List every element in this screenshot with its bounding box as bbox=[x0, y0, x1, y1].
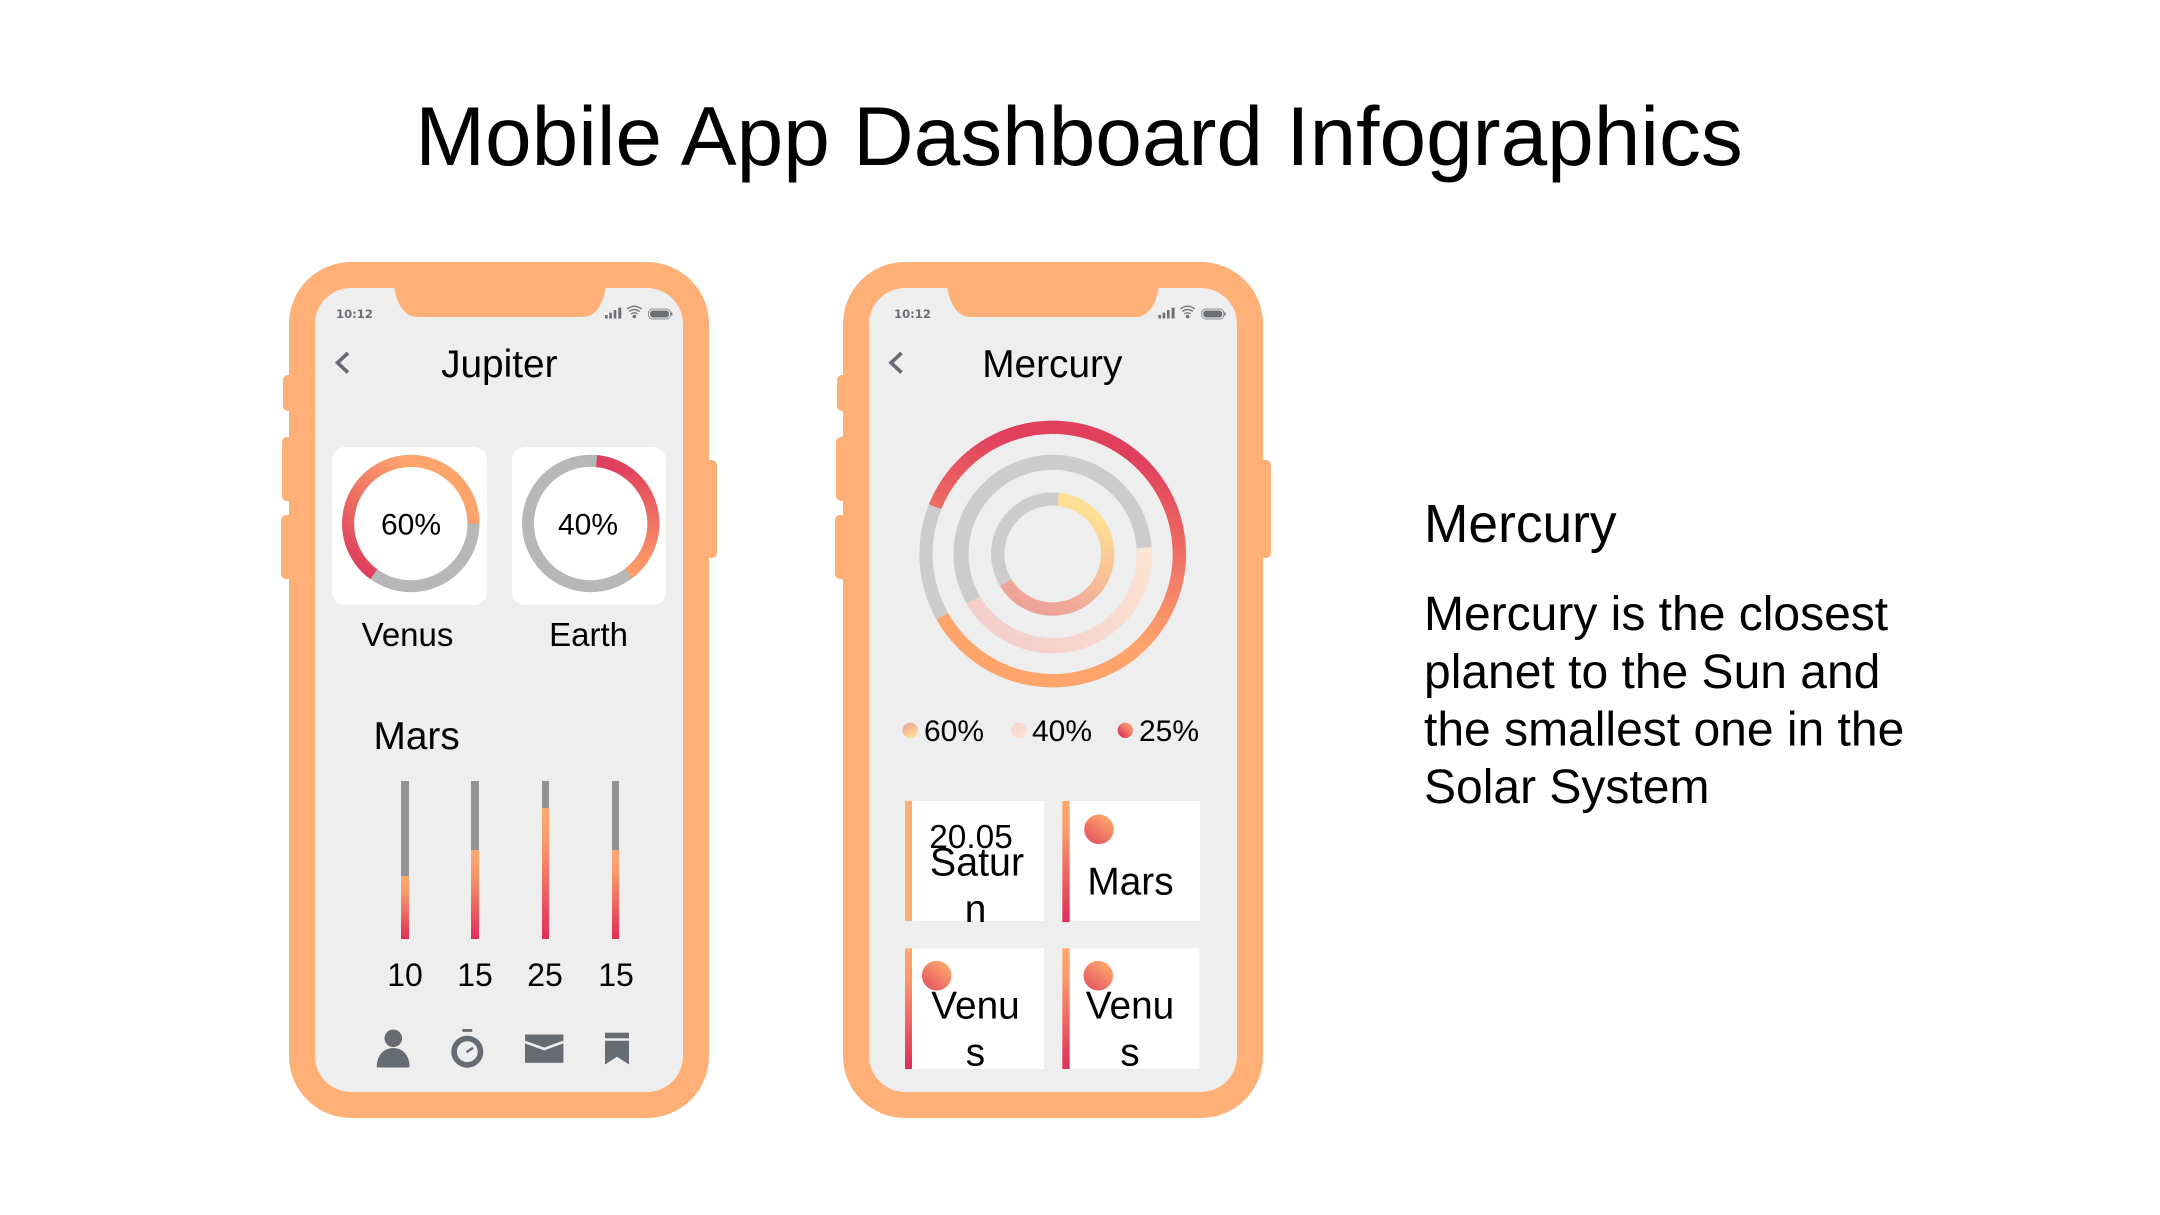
tile: Venus: s bbox=[1120, 1032, 1140, 1074]
status bar bbox=[336, 306, 672, 321]
icon: back chevron bbox=[891, 353, 902, 372]
text block: Mercury description: Mercury is the closest bbox=[1424, 588, 1888, 641]
tile: Saturn: n bbox=[965, 888, 986, 931]
legend bbox=[903, 715, 1199, 748]
bar chart: Mars: 10 bbox=[387, 957, 423, 993]
tile: Saturn: 20.05 bbox=[929, 819, 1013, 856]
radial chart bbox=[926, 427, 1179, 681]
phone body bbox=[281, 262, 717, 1118]
legend: 25% bbox=[1139, 715, 1199, 748]
title: Mobile App Dashboard Infographics bbox=[415, 89, 1743, 183]
tile: Venus bbox=[905, 948, 1044, 1074]
card: Venus 60% bbox=[332, 447, 487, 605]
text block: Mercury description: the smallest one in the bbox=[1424, 704, 1904, 756]
icon: back chevron bbox=[338, 353, 348, 372]
phone body bbox=[835, 262, 1271, 1118]
text block: Mercury description: Solar System bbox=[1424, 761, 1709, 814]
tile: Mars: Mars bbox=[1087, 860, 1174, 904]
card: Earth 40% bbox=[512, 447, 666, 605]
icon: stopwatch bbox=[454, 1029, 480, 1065]
legend: 40% bbox=[1032, 715, 1092, 748]
bar chart: Mars: 15 bbox=[598, 957, 634, 993]
text block: Mercury description bbox=[1424, 588, 1904, 814]
card: Earth 40%: 40% bbox=[558, 508, 618, 542]
tile: Venus: s bbox=[966, 1032, 985, 1074]
bar chart: Mars bbox=[387, 781, 634, 993]
legend: 60% bbox=[924, 715, 984, 748]
tile: Saturn bbox=[905, 801, 1044, 931]
tile: Venus bbox=[1062, 948, 1200, 1074]
tile: Venus: Venu bbox=[931, 985, 1020, 1028]
status bar: 10:12 bbox=[336, 307, 373, 321]
icon: envelope bbox=[525, 1034, 563, 1063]
heading: Mercury: Mercury bbox=[982, 343, 1123, 386]
bar chart: Mars: 15 bbox=[457, 957, 493, 993]
label: Earth: Earth bbox=[549, 616, 628, 653]
heading: Mercury description: Mercury bbox=[1424, 495, 1617, 554]
heading: Jupiter: Jupiter bbox=[441, 343, 558, 386]
tile: Saturn: Satur bbox=[930, 840, 1024, 884]
label: Venus: Venus bbox=[362, 616, 453, 653]
phone: Jupiter dashboard bbox=[281, 262, 717, 1118]
heading: Mars: Mars bbox=[374, 715, 460, 758]
tile: Venus: Venu bbox=[1086, 985, 1174, 1028]
tile: Mars bbox=[1062, 801, 1200, 922]
status bar bbox=[894, 306, 1226, 321]
icon: person bbox=[377, 1030, 410, 1068]
icon: bookmark bbox=[605, 1033, 629, 1064]
phone: Mercury dashboard bbox=[835, 262, 1271, 1118]
status bar: 10:12 bbox=[894, 307, 931, 321]
card: Venus 60%: 60% bbox=[381, 508, 441, 542]
text block: Mercury description: planet to the Sun and bbox=[1424, 646, 1880, 699]
bar chart: Mars: 25 bbox=[527, 957, 563, 993]
